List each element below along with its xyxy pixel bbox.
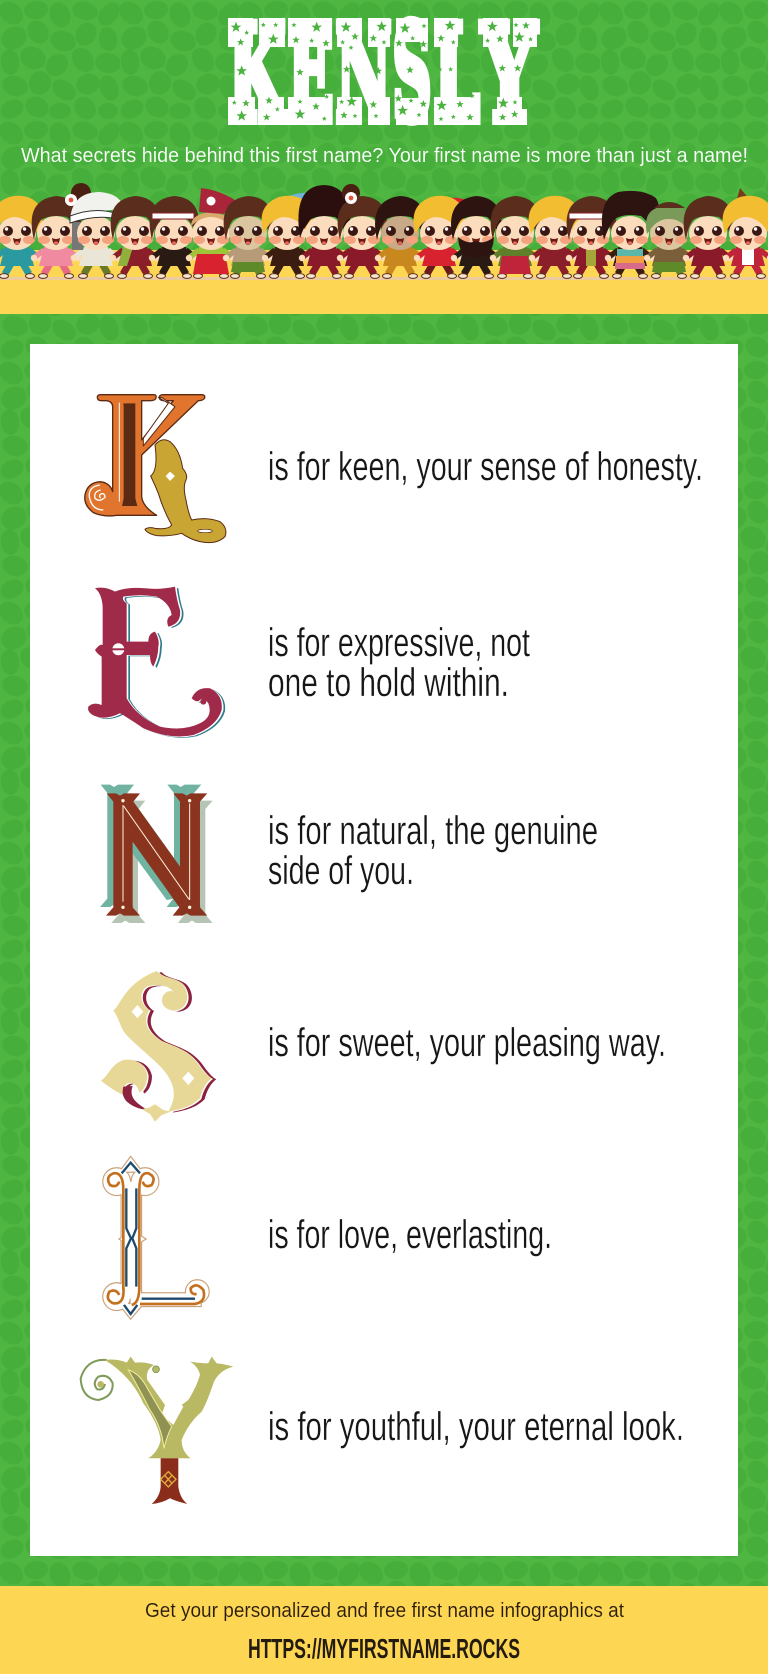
footer url: HTTPS://MYFIRSTNAME.ROCKS (248, 1633, 520, 1664)
row E (88, 587, 530, 738)
character 20 (723, 188, 768, 278)
icon: ornate letter K (85, 395, 226, 543)
yellow band behind characters (0, 250, 768, 314)
icon: ornate letter E (88, 587, 225, 738)
character 2 (31, 183, 91, 278)
text line: is for love, everlasting. (268, 1213, 552, 1257)
character 1 (0, 196, 42, 278)
row S (101, 971, 666, 1122)
icon: ornate letter L (103, 1157, 209, 1318)
character 10 (337, 184, 387, 278)
band of cartoon characters (0, 183, 768, 280)
character 11 (375, 196, 426, 278)
text lines: is for natural, the genuine (268, 809, 598, 853)
text lines: one to hold within. (268, 661, 509, 705)
character 6 (186, 188, 241, 278)
character 16 (566, 196, 616, 278)
text lines: side of you. (268, 849, 414, 893)
icon: ornate letter Y (81, 1357, 233, 1504)
row L (103, 1157, 552, 1318)
character 14 (490, 196, 540, 278)
character 9 (298, 185, 350, 278)
character 15 (529, 196, 579, 278)
title: KENSLY (227, 0, 538, 153)
text lines (268, 809, 598, 893)
character 12 (414, 196, 469, 278)
icon: ornate letter N (100, 785, 213, 923)
character 7 (223, 196, 273, 278)
character 3 (70, 192, 124, 278)
icon: ornate letter S (101, 971, 216, 1122)
main white panel (30, 344, 738, 1556)
character 17 (602, 191, 660, 278)
text lines: is for expressive, not (268, 621, 530, 665)
character 19 (683, 196, 733, 278)
row N (100, 785, 598, 923)
character 4 (110, 196, 160, 278)
subtitle: What secrets hide behind this first name? Your first name is more than just a name! (21, 145, 748, 167)
character 8 (262, 193, 323, 278)
row K (85, 395, 703, 543)
row Y (81, 1357, 684, 1504)
character 18 (644, 202, 694, 278)
footer band (0, 1586, 768, 1674)
footer text: Get your personalized and free first name infographics at (145, 1600, 624, 1622)
character 13 (451, 196, 502, 278)
character 5 (149, 196, 199, 278)
stars on title (231, 20, 533, 121)
text lines (268, 621, 530, 705)
